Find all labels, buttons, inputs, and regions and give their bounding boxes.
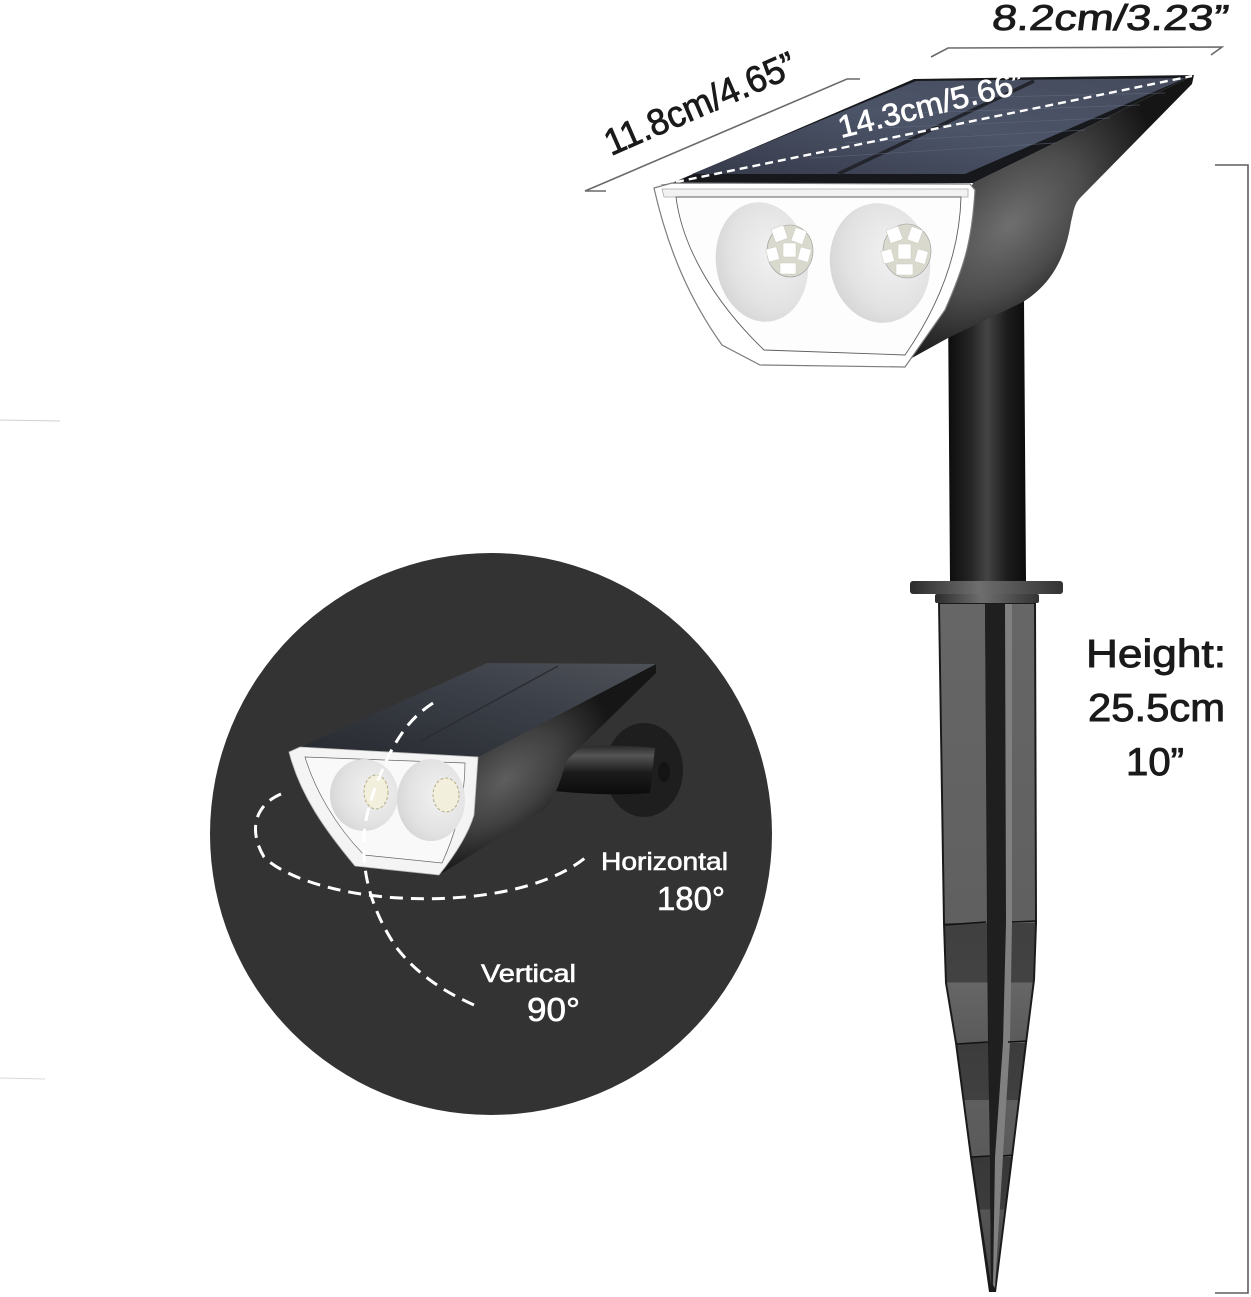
mount stem [545, 746, 655, 794]
lens inner white [676, 197, 961, 355]
wall mount disc [605, 723, 683, 817]
dimension bracket: height [1215, 165, 1248, 1293]
right LED cluster [881, 224, 931, 278]
label: height [1086, 633, 1226, 784]
right reflector [822, 197, 938, 329]
lens cover [654, 183, 975, 367]
dimension bracket: panel width [931, 47, 1222, 57]
label: vertical 90: Vertical [481, 960, 576, 988]
left LED cluster [766, 225, 813, 277]
label: height: 25.5cm [1088, 687, 1225, 730]
label: vertical 90 [481, 960, 580, 1028]
small lens inner [305, 757, 465, 863]
label: horizontal 180: 180° [657, 880, 725, 917]
lens top band [662, 189, 968, 197]
small LED clusters [364, 775, 459, 812]
small lens [289, 747, 478, 875]
small solar panel [301, 663, 656, 757]
label: height: 10” [1126, 741, 1184, 784]
label: horizontal 180 [601, 848, 728, 917]
solar panel [660, 75, 1194, 185]
label: vertical 90: 90° [527, 991, 580, 1028]
dark circle background [210, 553, 772, 1115]
flange collar [910, 581, 1063, 603]
label: horizontal 180: Horizontal [601, 848, 728, 876]
faint edge mark upper [0, 420, 60, 421]
small lamp housing [439, 664, 656, 875]
stake spike [938, 602, 1037, 1292]
label: panel length 11.8cm: 11.8cm/4.65” [598, 44, 802, 163]
stem [948, 300, 1026, 582]
horizontal rotation dashed arc [255, 794, 585, 899]
small reflectors [330, 759, 465, 841]
dimension bracket: panel length [585, 79, 860, 191]
main lamp product [654, 75, 1194, 1292]
panel: rotation circle [210, 553, 772, 1115]
lamp housing [901, 75, 1194, 364]
faint edge mark lower [0, 1078, 45, 1079]
left reflector [708, 196, 816, 328]
vertical rotation dashed arc [364, 703, 481, 1008]
label: height: Height: [1086, 633, 1226, 676]
label: diagonal 14.3cm: 14.3cm/5.66” [834, 65, 1027, 145]
mount screw [658, 762, 670, 782]
